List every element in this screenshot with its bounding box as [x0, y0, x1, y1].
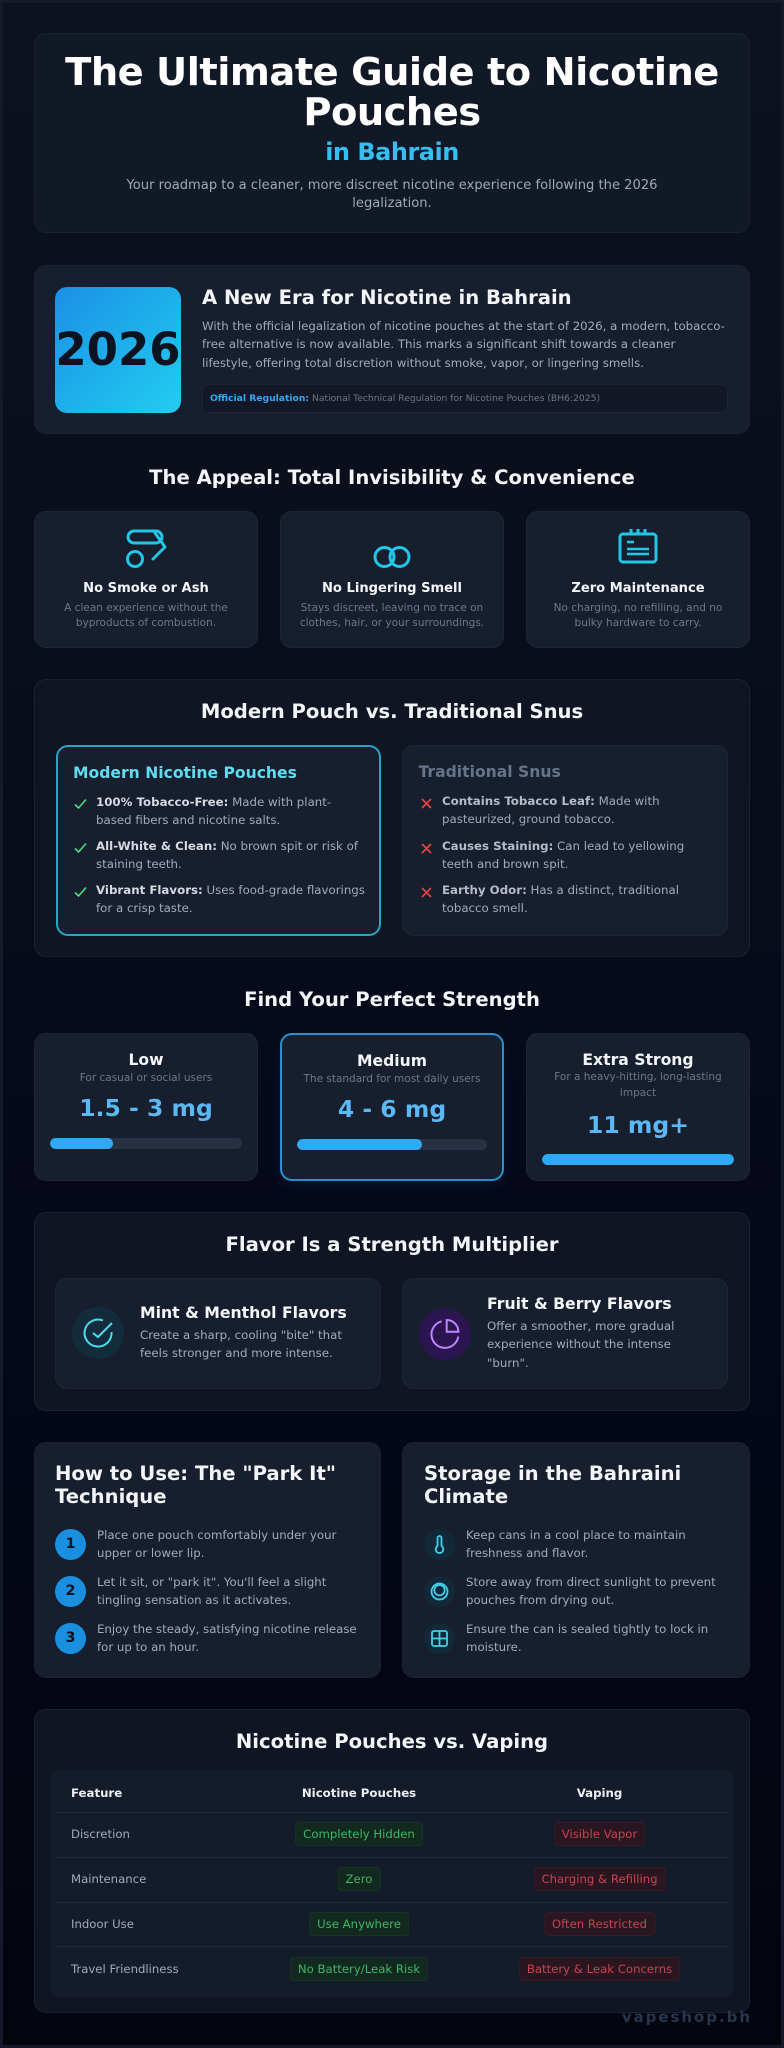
row: travel friendliness: Battery & Leak Concerns: [527, 1962, 672, 1976]
icon: ring: [424, 1576, 455, 1607]
storage tip 2: [424, 1576, 734, 1607]
ring glyph: [430, 1582, 449, 1601]
heading: how to use: Technique: [55, 1485, 167, 1508]
row: travel friendliness: [50, 1957, 734, 1981]
list item: [74, 839, 358, 871]
intro text: [126, 178, 658, 211]
comparison table: [50, 1770, 734, 1997]
new era text: With the official legalization of nicotine pouches at the start of 2026, a modern, tobacco-: [202, 319, 725, 333]
table header row: [50, 1783, 734, 1803]
step number: 3: [65, 1630, 76, 1646]
step number: [55, 1623, 86, 1654]
title: The Ultimate Guide to Nicotine: [65, 50, 719, 95]
check icon: [74, 799, 86, 810]
heading: modern pouches: Modern Nicotine Pouches: [73, 764, 297, 782]
new era text: [202, 319, 725, 370]
heading: storage: Storage in the Bahraini: [424, 1462, 681, 1485]
strength bar: [542, 1154, 734, 1165]
subtitle: in Bahrain: in Bahrain: [325, 138, 459, 166]
tip text: [466, 1572, 716, 1608]
panel: no lingering smell: [280, 511, 504, 648]
panel: fruit flavors: [402, 1278, 728, 1389]
list item: [422, 883, 679, 915]
panel: how to use: [34, 1442, 381, 1678]
item text: All-White & Clean: No brown spit or risk of: [96, 839, 358, 853]
heading: flavor: Flavor Is a Strength Multiplier: [225, 1233, 559, 1256]
storage tip 3: [424, 1623, 734, 1654]
card text: No charging, no refilling, and no: [554, 602, 722, 614]
watermark: vapeshop.bh: [622, 2008, 752, 2026]
row: discretion: Completely Hidden: [303, 1827, 415, 1841]
item text: [96, 839, 358, 871]
icon: no smell: [374, 546, 410, 568]
row: indoor use: Indoor Use: [71, 1917, 134, 1931]
tip text: Store away from direct sunlight to prevent: [466, 1574, 716, 1588]
step 2: [55, 1574, 326, 1607]
icon: no smoke: [126, 530, 166, 568]
strength value: 1.5 - 3 mg: [79, 1094, 213, 1122]
tip text: moisture.: [466, 1640, 522, 1654]
flavor text: [487, 1319, 674, 1370]
heading: pouch vs snus: Modern Pouch vs. Traditional Snus: [201, 700, 583, 723]
heading: new era: A New Era for Nicotine in Bahrain: [202, 286, 572, 309]
strength description: [554, 1071, 722, 1099]
thermometer glyph: [432, 1535, 447, 1554]
item text: Contains Tobacco Leaf: Made with: [442, 794, 660, 808]
check icon: [74, 843, 86, 854]
panel: zero maintenance: [526, 511, 750, 648]
cross icon: [422, 887, 432, 898]
step number: 1: [65, 1536, 76, 1552]
heading: storage: Climate: [424, 1485, 508, 1508]
flavor text: Offer a smoother, more gradual: [487, 1319, 674, 1333]
flavor text: feels stronger and more intense.: [140, 1346, 333, 1360]
strength description: For a heavy-hitting, long-lasting: [554, 1071, 722, 1083]
panel: flavor multiplier: [34, 1212, 750, 1411]
step text: tingling sensation as it activates.: [97, 1592, 291, 1606]
flavor text: [140, 1328, 342, 1360]
step text: [97, 1528, 336, 1560]
item text: for a crisp taste.: [96, 901, 193, 915]
step text: Enjoy the steady, satisfying nicotine release: [97, 1622, 357, 1636]
panel: mint flavors: [55, 1278, 381, 1389]
item text: [96, 795, 331, 827]
row: travel friendliness: No Battery/Leak Risk: [298, 1962, 420, 1976]
bar fill: [542, 1154, 734, 1165]
2026 badge: [55, 287, 181, 413]
bar fill: [297, 1139, 422, 1150]
row: travel friendliness: Travel Friendliness: [71, 1962, 179, 1976]
item text: [442, 838, 684, 871]
step text: upper or lower lip.: [97, 1546, 204, 1560]
tip text: Ensure the can is sealed tightly to lock in: [466, 1622, 708, 1636]
step 3: [55, 1622, 357, 1654]
item text: Causes Staining: Can lead to yellowing: [442, 838, 684, 852]
icon: zero maintenance: [618, 529, 658, 564]
step text: [97, 1622, 357, 1654]
row: indoor use: [50, 1912, 734, 1936]
cross icon: [422, 798, 432, 809]
card text: A clean experience without the: [64, 602, 228, 614]
panel: low strength: [34, 1033, 258, 1181]
check icon: [74, 887, 86, 898]
list item: [422, 794, 660, 826]
item text: Vibrant Flavors: Uses food-grade flavorings: [96, 883, 365, 897]
flavor text: "burn".: [487, 1356, 529, 1370]
storage tip 1: [424, 1529, 734, 1560]
row: maintenance: Zero: [346, 1872, 372, 1886]
step text: [97, 1574, 326, 1606]
card title: No Lingering Smell: [322, 581, 462, 596]
tip text: [466, 1526, 686, 1562]
title: Pouches: [303, 90, 481, 135]
step text: for up to an hour.: [97, 1640, 199, 1654]
row: discretion: Visible Vapor: [562, 1827, 637, 1841]
strength value: 4 - 6 mg: [338, 1095, 446, 1123]
step text: Let it sit, or "park it". You'll feel a slight: [97, 1574, 326, 1588]
cross icon: [422, 843, 432, 854]
item text: Earthy Odor: Has a distinct, traditional: [442, 883, 679, 897]
item text: [442, 883, 679, 915]
icon: fruit: [419, 1308, 471, 1360]
title: [65, 50, 719, 135]
heading: how to use: [55, 1462, 336, 1508]
card title: Zero Maintenance: [571, 581, 705, 596]
tip text: [466, 1620, 708, 1656]
strength description: The standard for most daily users: [304, 1072, 480, 1084]
regulation text: Official Regulation: National Technical Regulation for Nicotine Pouches (BH6:2025): [210, 393, 600, 404]
grid glyph: [431, 1630, 448, 1647]
panel: pouches vs vaping: [34, 1709, 750, 2013]
card title: No Smoke or Ash: [83, 581, 209, 596]
panel: storage: [402, 1442, 750, 1678]
card text: [64, 602, 228, 629]
heading: the appeal: The Appeal: Total Invisibility & Convenience: [149, 466, 635, 489]
heading: pouches vs vaping: Nicotine Pouches vs. Vaping: [236, 1730, 548, 1753]
item text: staining teeth.: [96, 857, 182, 871]
icon: grid: [424, 1623, 455, 1654]
table header row: Nicotine Pouches: [302, 1786, 416, 1800]
list item: [74, 883, 365, 915]
intro text: Your roadmap to a cleaner, more discreet nicotine experience following the 2026: [126, 178, 658, 193]
strength name: Medium: [357, 1052, 427, 1070]
icon: mint: [72, 1307, 124, 1359]
item text: [96, 883, 365, 915]
heading: find your strength: Find Your Perfect Strength: [244, 988, 540, 1011]
strength value: 11 mg+: [587, 1111, 689, 1139]
tip text: pouches from drying out.: [466, 1592, 614, 1606]
row: discretion: [50, 1822, 734, 1846]
card text: Stays discreet, leaving no trace on: [301, 602, 483, 614]
item text: 100% Tobacco-Free: Made with plant-: [96, 795, 331, 809]
tip text: Keep cans in a cool place to maintain: [466, 1528, 686, 1542]
card text: clothes, hair, or your surroundings.: [300, 617, 484, 629]
flavor name: Fruit & Berry Flavors: [487, 1294, 672, 1312]
new era text: free alternative is now available. This marks a significant shift towards a cleaner: [202, 337, 675, 351]
panel: new era: [34, 265, 750, 434]
header panel: [34, 33, 750, 233]
item text: based fibers and nicotine salts.: [96, 813, 280, 827]
intro text: legalization.: [352, 196, 432, 211]
step number: [55, 1576, 86, 1607]
card text: [300, 602, 484, 629]
row: maintenance: Charging & Refilling: [541, 1872, 658, 1886]
panel: traditional snus: [402, 745, 728, 936]
step number: 2: [65, 1583, 76, 1599]
icon: thermometer: [424, 1529, 455, 1560]
panel: medium strength: [280, 1033, 504, 1181]
row: indoor use: Often Restricted: [552, 1917, 647, 1931]
strength bar: [297, 1139, 487, 1150]
table header row: Vaping: [577, 1786, 622, 1800]
flavor name: Mint & Menthol Flavors: [140, 1303, 347, 1322]
fruit pie glyph: [430, 1319, 460, 1349]
heading: traditional snus: Traditional Snus: [418, 763, 561, 781]
strength name: Extra Strong: [582, 1051, 694, 1069]
table header row: Feature: [71, 1786, 122, 1800]
step text: Place one pouch comfortably under your: [97, 1528, 336, 1542]
strength description: For casual or social users: [80, 1072, 212, 1084]
panel: modern pouches: [56, 745, 381, 936]
step number: [55, 1529, 86, 1560]
row: maintenance: Maintenance: [71, 1872, 146, 1886]
new era text: lifestyle, offering total discretion without smoke, vapor, or lingering smells.: [202, 356, 644, 370]
heading: storage: [424, 1462, 681, 1509]
panel: pouch vs snus: [34, 679, 750, 957]
panel: extra strong: [526, 1033, 750, 1181]
strength description: impact: [620, 1087, 656, 1099]
row: indoor use: Use Anywhere: [317, 1917, 401, 1931]
flavor text: experience without the intense: [487, 1337, 671, 1351]
strength bar: [50, 1138, 242, 1149]
row: discretion: Discretion: [71, 1827, 130, 1841]
list item: [422, 838, 684, 871]
strength name: Low: [128, 1051, 164, 1069]
card text: [554, 602, 722, 629]
item text: pasteurized, ground tobacco.: [442, 812, 615, 826]
bar fill: [50, 1138, 113, 1149]
item text: [442, 794, 660, 826]
item text: teeth and brown spit.: [442, 857, 568, 871]
2026 label: 2026: [55, 323, 181, 376]
item text: tobacco smell.: [442, 901, 528, 915]
card text: byproducts of combustion.: [76, 617, 216, 629]
panel: no smoke or ash: [34, 511, 258, 648]
official regulation callout: [202, 384, 728, 413]
tip text: freshness and flavor.: [466, 1546, 588, 1560]
mint check glyph: [84, 1318, 113, 1348]
row: maintenance: [50, 1867, 734, 1891]
heading: how to use: How to Use: The "Park It": [55, 1462, 336, 1485]
flavor text: Create a sharp, cooling "bite" that: [140, 1328, 342, 1342]
card text: bulky hardware to carry.: [575, 617, 701, 629]
list item: [74, 795, 331, 827]
step 1: [55, 1528, 336, 1560]
